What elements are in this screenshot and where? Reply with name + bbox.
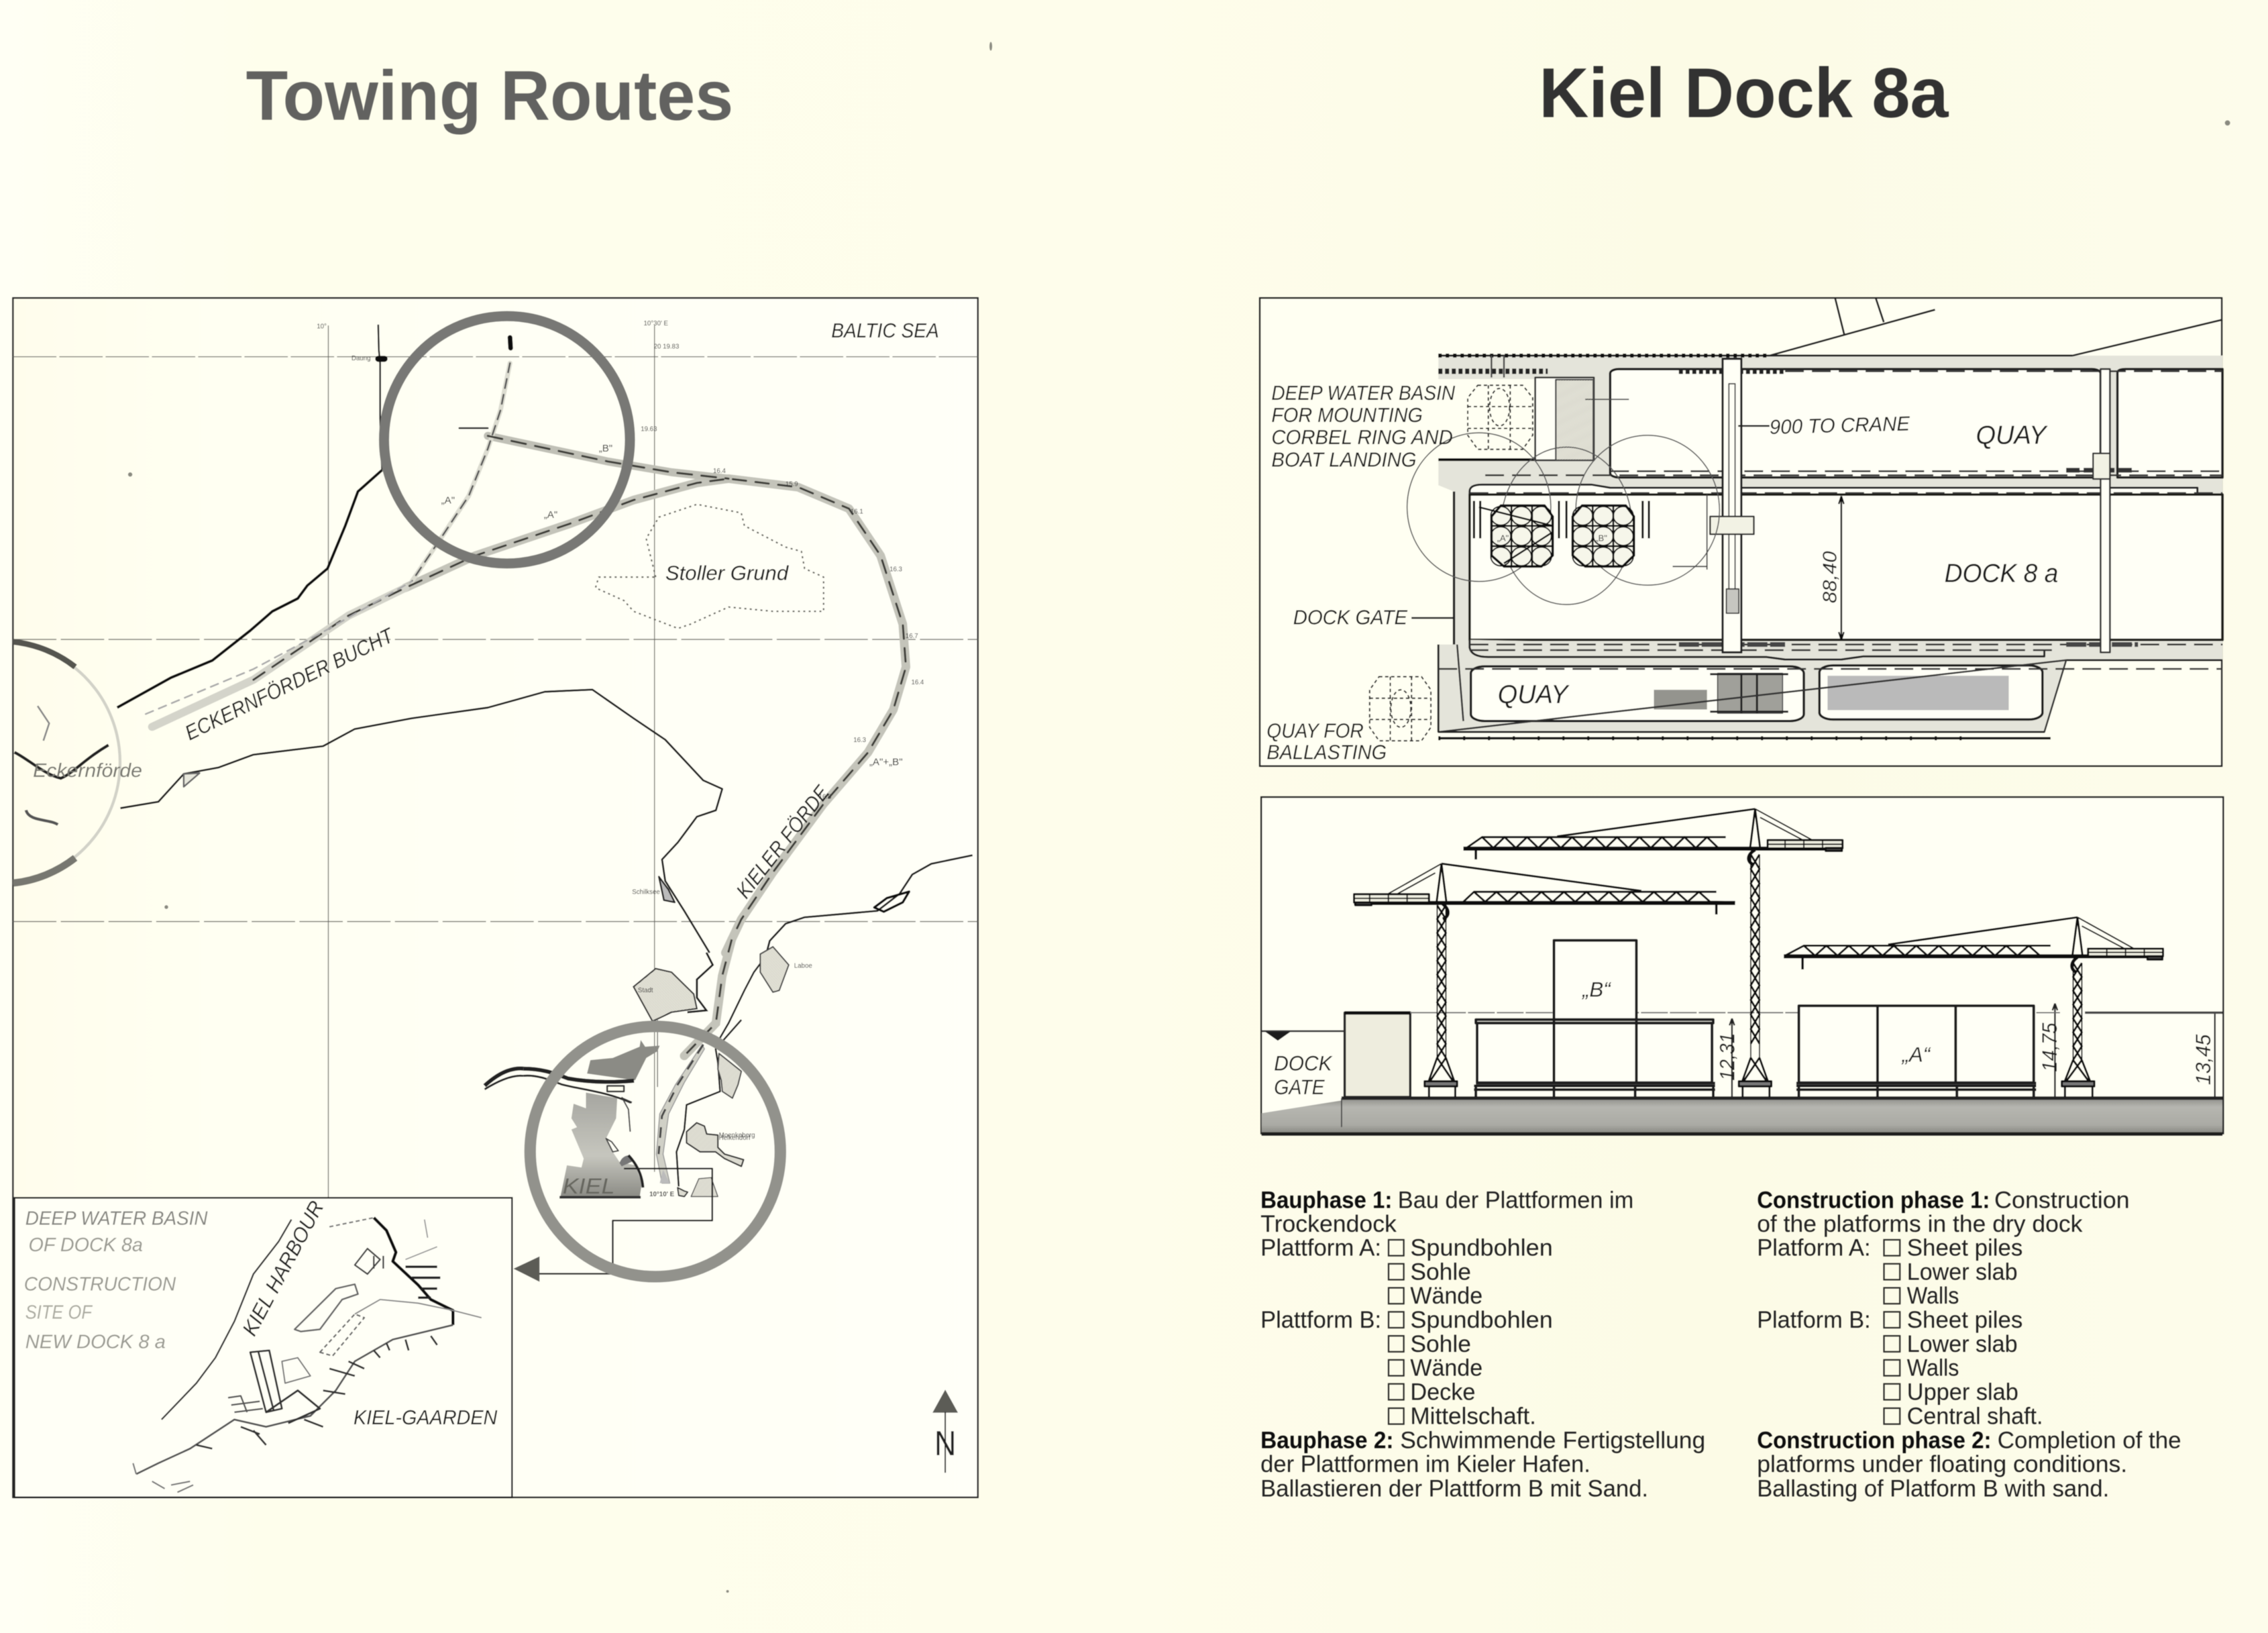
label: quay for ballasting: BALLASTING: [1266, 742, 1387, 764]
text block: English construction phases: platforms under floating conditions.: [1757, 1451, 2127, 1477]
small route annotations: 19.63: [641, 426, 657, 433]
text block: English construction phases: [1757, 1186, 2181, 1502]
label: dock gate elevation: GATE: [1274, 1075, 1326, 1099]
panel: towing route map: [0, 298, 978, 1497]
text block: German construction phases: Trockendock: [1260, 1210, 1397, 1237]
platform B elevation: [1474, 941, 1715, 1097]
label: Eckernfoerde: Eckernförde: [33, 760, 142, 782]
text block: English construction phases: Construction phase 1:: [1757, 1186, 1990, 1213]
label: dock gate: DOCK GATE: [1293, 607, 1408, 629]
label: Baltic Sea: BALTIC SEA: [831, 320, 939, 342]
label: quay for ballasting: [1266, 720, 1387, 764]
text block: English construction phases: Lower slab: [1907, 1258, 2018, 1285]
text block: German construction phases: Bau der Plattformen im: [1398, 1186, 1633, 1213]
small route annotations: 16.3: [889, 566, 902, 574]
text block: German construction phases: Wände: [1410, 1282, 1482, 1309]
inset labels: faded basin text: [24, 1208, 208, 1353]
label: deep water basin: FOR MOUNTING: [1271, 405, 1423, 427]
dock crane rails: [1723, 359, 1741, 652]
label: platform B: „B“: [1581, 978, 1611, 1002]
small route annotations: Stadt: [638, 987, 653, 994]
label: quay south: QUAY: [1498, 680, 1570, 709]
text block: German construction phases: Decke: [1410, 1378, 1475, 1405]
text block: English construction phases: Platform B:: [1757, 1306, 1871, 1333]
north arrow: N: [934, 1424, 956, 1463]
label: Stoller Grund: Stoller Grund: [665, 563, 789, 585]
inset labels: faded basin text: SITE OF: [25, 1302, 93, 1324]
label: dock gate elevation: DOCK: [1274, 1052, 1333, 1075]
text block: German construction phases: der Plattformen im Kieler Hafen.: [1260, 1451, 1590, 1477]
Kiel ring detail: [523, 1020, 743, 1274]
ghost platform: ballasting quay: [1370, 677, 1431, 741]
towing route bands: [146, 337, 906, 953]
text block: German construction phases: Bauphase 1:: [1260, 1186, 1392, 1213]
small route annotations: Laboe: [794, 963, 812, 970]
small route annotations: 16.1: [851, 508, 863, 515]
text block: German construction phases: Mittelschaft.: [1410, 1403, 1536, 1430]
label: dock gate elevation: [1274, 1052, 1333, 1099]
checkboxes: German list: [1389, 1240, 1404, 1424]
dimension lines: [1729, 1004, 2215, 1097]
platform B in plan: [1572, 506, 1634, 566]
label: deep water basin: DEEP WATER BASIN: [1271, 382, 1455, 405]
label: Kieler Foerde: KIELER FÖRDE: [732, 780, 834, 903]
title: Towing Routes: Towing Routes: [246, 56, 733, 135]
crane right: [1784, 917, 2163, 1097]
text block: English construction phases: Central shaft.: [1907, 1403, 2043, 1430]
small route annotations: 16.7: [906, 633, 918, 640]
text block: English construction phases: Lower slab: [1907, 1330, 2018, 1357]
text block: German construction phases: Ballastieren der Plattform B mit Sand.: [1260, 1475, 1648, 1502]
label: quay north: QUAY: [1976, 421, 2049, 450]
dimension: 13,45: 13,45: [2192, 1034, 2215, 1085]
label: 900 to crane: 900 TO CRANE: [1769, 413, 1910, 439]
text block: English construction phases: Construction: [1994, 1186, 2130, 1213]
small route annotations: „B": [599, 443, 612, 454]
label: quay for ballasting: QUAY FOR: [1266, 720, 1364, 742]
small route annotations: 16.3: [853, 737, 866, 744]
text block: English construction phases: Construction phase 2:: [1757, 1426, 1992, 1453]
text block: English construction phases: Completion of the: [1998, 1426, 2181, 1453]
label: Kiel Harbour: KIEL HARBOUR: [237, 1197, 329, 1340]
plan drawing: [1370, 298, 2222, 741]
label: dock 8 a: DOCK 8 a: [1945, 559, 2058, 588]
text block: German construction phases: Spundbohlen: [1410, 1306, 1553, 1333]
platform tags: „A": [1497, 533, 1509, 543]
text block: English construction phases: Walls: [1907, 1282, 1959, 1309]
dimension: 88,40: 88,40: [1819, 551, 1841, 603]
arrow to inset: [513, 1257, 539, 1281]
inset: Kiel harbour map: [15, 1197, 512, 1497]
small route annotations: 16.8: [818, 793, 831, 800]
small route annotations: 16.4: [713, 468, 726, 475]
inset labels: faded basin text: OF DOCK 8a: [28, 1234, 143, 1256]
label: Kiel-Gaarden: KIEL-GAARDEN: [354, 1407, 498, 1429]
text block: German construction phases: Schwimmende Fertigstellung: [1400, 1426, 1705, 1453]
text block: English construction phases: Walls: [1907, 1355, 1959, 1381]
label: deep water basin: [1271, 382, 1455, 471]
Stoller Grund shoal outline: [596, 505, 824, 629]
text block: German construction phases: Sohle: [1410, 1330, 1471, 1357]
text block: English construction phases: Upper slab: [1907, 1378, 2018, 1405]
text block: English construction phases: Ballasting of Platform B with sand.: [1757, 1475, 2109, 1502]
circle: Kiel: [530, 1026, 780, 1277]
small route annotations: Schilksee: [632, 889, 660, 896]
text block: English construction phases: Platform A:: [1757, 1234, 1871, 1261]
map grid lines: [13, 325, 978, 1198]
text block: English construction phases: Sheet piles: [1907, 1234, 2022, 1261]
label: Eckernfoerder Bucht: ECKERNFÖRDER BUCHT: [181, 623, 398, 745]
inset labels: faded basin text: CONSTRUCTION: [24, 1273, 176, 1295]
small route annotations: 10°: [317, 323, 327, 330]
small route annotations: 15.9: [786, 481, 798, 488]
inset labels: faded basin text: DEEP WATER BASIN: [25, 1208, 208, 1230]
small route annotations: 10°30' E: [644, 320, 668, 327]
small route annotations: 20 19.83: [654, 344, 679, 351]
north arrow: [932, 1389, 958, 1473]
text block: English construction phases: of the platforms in the dry dock: [1757, 1210, 2083, 1237]
platform A elevation: [1796, 1006, 2036, 1097]
crane left: [1354, 863, 1735, 1097]
inset shoreline drawing: [133, 1218, 482, 1492]
circle: Bight towing area: [384, 316, 630, 564]
label: deep water basin: CORBEL RING AND: [1271, 427, 1453, 449]
crane centre: [1463, 809, 1843, 1097]
text block: English construction phases: Sheet piles: [1907, 1306, 2022, 1333]
text block: German construction phases: Plattform B:: [1260, 1306, 1381, 1333]
dimension: 14,75: 14,75: [2038, 1022, 2061, 1072]
label: Kiel: KIEL: [563, 1174, 614, 1198]
inset labels: faded basin text: NEW DOCK 8 a: [25, 1332, 166, 1353]
platform tags: „B": [1595, 533, 1607, 543]
title: Kiel Dock 8a: Kiel Dock 8a: [1539, 54, 1949, 133]
small route annotations: Daung: [352, 355, 371, 362]
text block: German construction phases: Spundbohlen: [1410, 1234, 1553, 1261]
ghost platform: deep water basin: [1468, 385, 1533, 450]
label: deep water basin: BOAT LANDING: [1271, 449, 1417, 471]
panel: dock elevation: [1261, 797, 2223, 1134]
text block: German construction phases: Plattform A:: [1260, 1234, 1381, 1261]
small route annotations: 10°10' E: [649, 1191, 675, 1198]
coastlines: [117, 325, 973, 953]
crane swing circles: [1407, 433, 1551, 582]
small route annotations: „A"+„B": [869, 757, 903, 768]
small route annotations: 16.4: [911, 679, 924, 686]
small route annotations: Heikendorf: [719, 1135, 751, 1142]
text block: German construction phases: [1260, 1186, 1705, 1502]
small route annotations: Moenkeberg: [719, 1132, 755, 1139]
text block: German construction phases: Sohle: [1410, 1258, 1471, 1285]
panel: dock plan: [1260, 298, 2222, 766]
small route annotations: „A": [544, 509, 557, 521]
small route annotations: „A": [441, 494, 455, 506]
platform tags: [1497, 533, 1607, 543]
checkboxes: English list: [1884, 1240, 1900, 1424]
elevation drawing: [1262, 809, 2222, 1134]
platform A in plan: [1479, 506, 1553, 566]
label: platform A: „A“: [1900, 1043, 1931, 1067]
small route annotations: [317, 320, 924, 1198]
dimension: 12,31: 12,31: [1715, 1033, 1739, 1081]
text block: German construction phases: Wände: [1410, 1355, 1482, 1381]
circle: Eckernfoerde: [0, 641, 120, 884]
dock gate block: [1345, 1012, 1410, 1097]
text block: German construction phases: Bauphase 2:: [1260, 1426, 1394, 1453]
Kiel approach detail: [484, 939, 789, 1090]
